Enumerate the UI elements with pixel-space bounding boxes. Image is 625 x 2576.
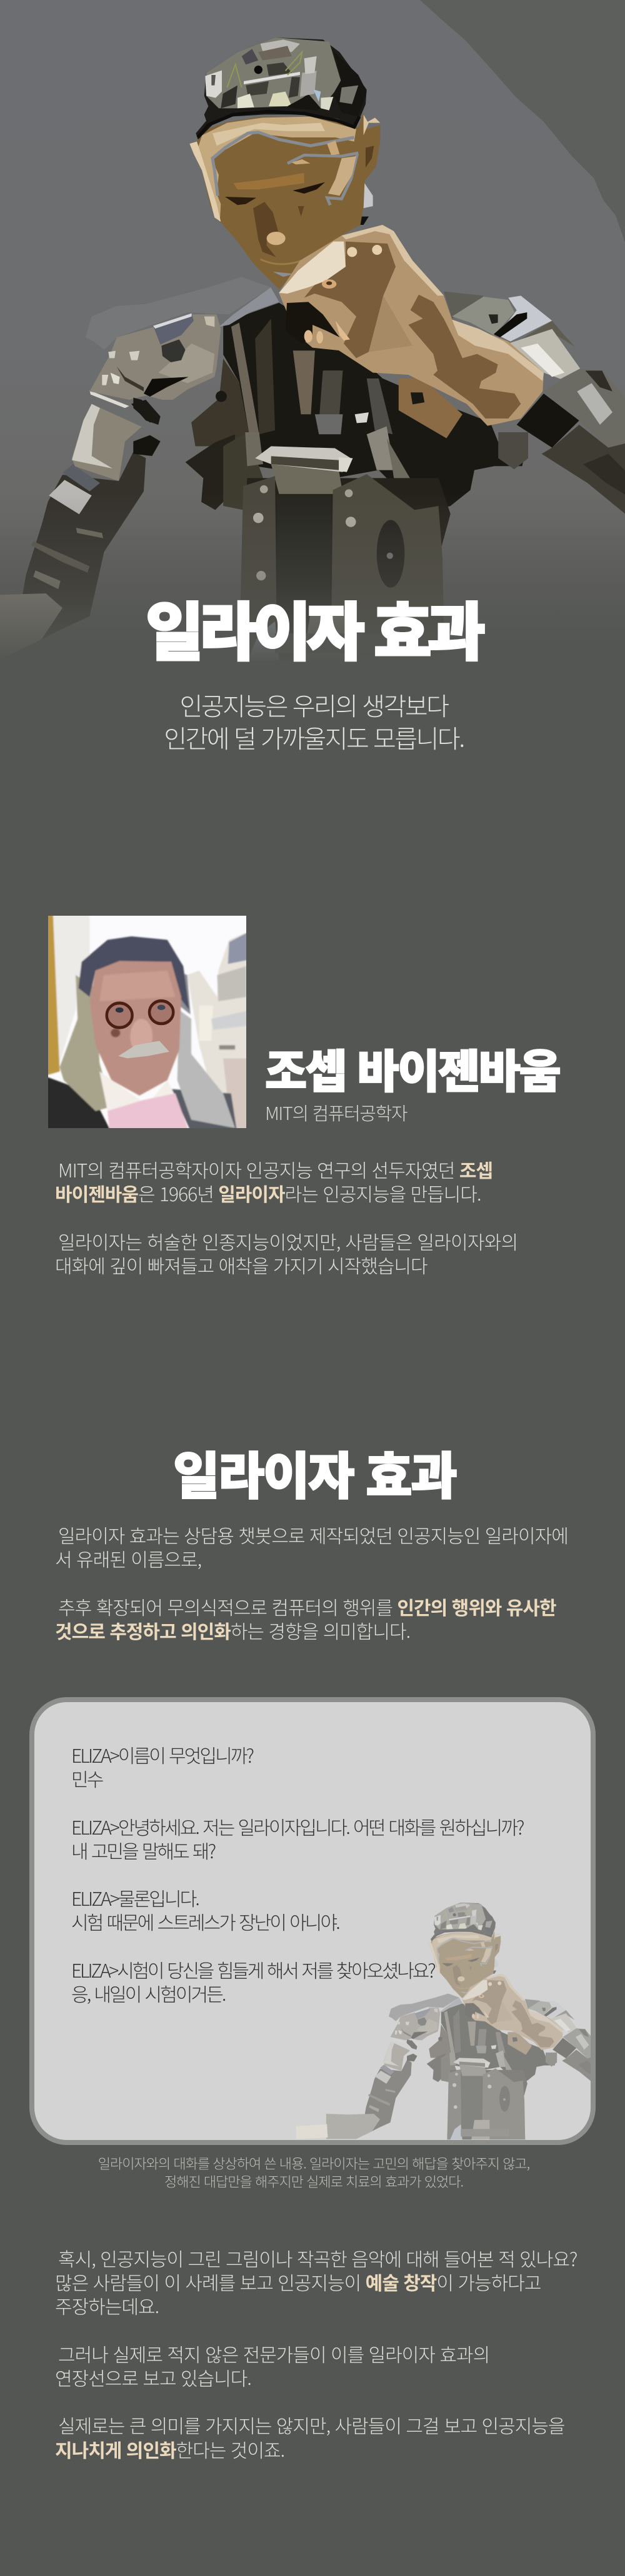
hero illustration: robot on grey background: [0, 0, 625, 653]
chat transcript: ELIZA>이름이 무엇입니까?: [71, 1741, 252, 1768]
closing text: 주장하는데요.: [55, 2292, 159, 2319]
chat transcript: 내 고민을 말해도 돼?: [71, 1836, 214, 1864]
section heading: 일라이자 효과: [173, 1436, 456, 1509]
definition text: [55, 1521, 568, 1644]
name heading: 조셉 바이젠바움: [265, 1035, 559, 1101]
closing text: 많은 사람들이 이 사례를 보고 인공지능이 예술 창작이 가능하다고: [55, 2268, 541, 2296]
card caption: 정해진 대답만을 해주지만 실제로 치료의 효과가 있었다.: [164, 2171, 463, 2191]
chat transcript: 시험 때문에 스트레스가 장난이 아니야.: [71, 1908, 339, 1935]
card caption: 일라이자와의 대화를 상상하여 쓴 내용. 일라이자는 고민의 해답을 찾아주지 않고,: [98, 2153, 529, 2173]
faded robot illustration: [296, 1903, 591, 2140]
closing text: 혹시, 인공지능이 그린 그림이나 작곡한 음악에 대해 들어본 적 있나요?: [58, 2244, 577, 2272]
biography text: 대화에 깊이 빠져들고 애착을 가지기 시작했습니다: [55, 1251, 428, 1279]
card caption: [98, 2153, 529, 2191]
title: 일라이자 효과: [146, 582, 481, 673]
definition text: 것으로 추정하고 의인화하는 경향을 의미합니다.: [55, 1617, 410, 1644]
subtitle: 인공지능은 우리의 생각보다: [180, 686, 448, 723]
definition text: 일라이자 효과는 상담용 챗봇으로 제작되었던 인공지능인 일라이자에: [58, 1521, 568, 1548]
subtitle: [164, 686, 464, 755]
closing text: [55, 2244, 577, 2463]
closing text: 실제로는 큰 의미를 가지지는 않지만, 사람들이 그걸 보고 인공지능을: [58, 2411, 565, 2439]
subtitle: 인간에 덜 가까울지도 모릅니다.: [164, 719, 464, 755]
biography text: 일라이자는 허술한 인종지능이었지만, 사람들은 일라이자와의: [58, 1227, 518, 1255]
chat transcript: [71, 1741, 524, 2007]
definition text: 서 유래된 이름으로,: [55, 1545, 201, 1572]
chat transcript: ELIZA>시험이 당신을 힘들게 해서 저를 찾아오셨나요?: [71, 1956, 434, 1983]
chat card: [29, 1697, 596, 2145]
biography text: 바이젠바움은 1966년 일라이자라는 인공지능을 만듭니다.: [55, 1179, 481, 1207]
closing text: 그러나 실제로 적지 않은 전문가들이 이를 일라이자 효과의: [58, 2340, 489, 2367]
biography text: MIT의 컴퓨터공학자이자 인공지능 연구의 선두자였던 조셉: [58, 1156, 492, 1183]
closing text: 연장선으로 보고 있습니다.: [55, 2364, 251, 2391]
chat transcript: ELIZA>물론입니다.: [71, 1884, 198, 1911]
chat transcript: 민수: [71, 1765, 102, 1792]
chat transcript: ELIZA>안녕하세요. 저는 일라이자입니다. 어떤 대화를 원하십니까?: [71, 1813, 523, 1840]
biography text: [55, 1156, 518, 1279]
job title: MIT의 컴퓨터공학자: [265, 1099, 407, 1126]
closing text: 지나치게 의인화한다는 것이죠.: [55, 2435, 284, 2463]
portrait photo: Joseph Weizenbaum: [48, 916, 246, 1128]
chat transcript: 응, 내일이 시험이거든.: [71, 1979, 225, 2007]
definition text: 추후 확장되어 무의식적으로 컴퓨터의 행위를 인간의 행위와 유사한: [58, 1593, 556, 1620]
